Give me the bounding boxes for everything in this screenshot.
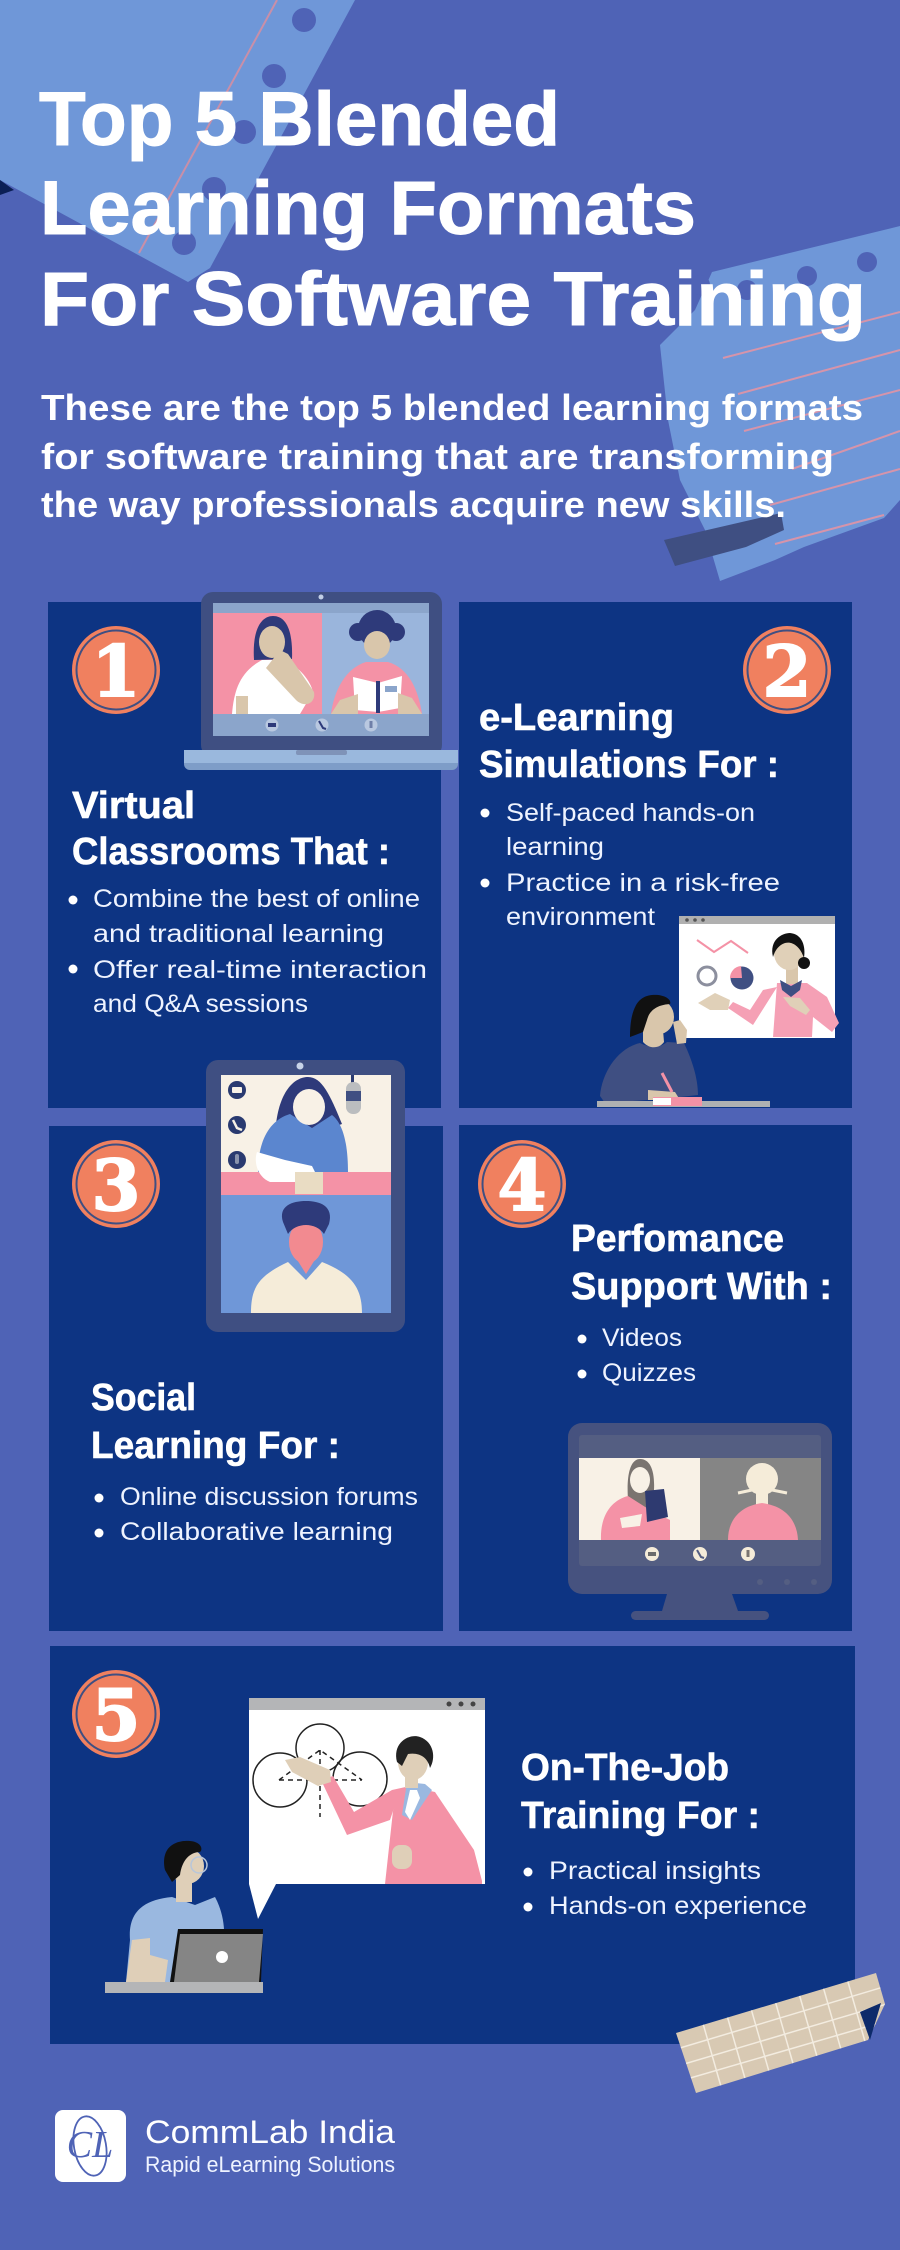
bullet list: Practice in a risk-free [506,869,780,897]
bullet list [578,1324,696,1387]
intro text [41,387,863,525]
number badge 2: 2 [763,630,811,713]
logo mark: CL [67,2124,113,2166]
logo: CommLab India [55,2110,395,2182]
number badge 5 [72,1670,160,1758]
logo mark [55,2110,126,2182]
heading: Perfomance [571,1218,784,1260]
heading: Virtual [72,785,195,827]
number badge 5: 5 [92,1674,140,1757]
heading [72,785,390,873]
bullet list: Hands-on experience [549,1892,807,1920]
panel 1: virtual classrooms [48,592,458,1108]
heading [521,1747,760,1837]
title: Top 5 Blended [39,77,560,162]
bullet list: Self-paced hands-on [506,799,755,827]
number badge 1: 1 [92,630,140,713]
speech bubble whiteboard with presenter [249,1698,485,1919]
heading: Learning For : [91,1425,340,1467]
bullet list: Videos [602,1324,682,1352]
company tagline: Rapid eLearning Solutions [145,2152,395,2177]
number badge 3 [72,1140,160,1228]
heading: On-The-Job [521,1747,729,1789]
bullet list: Collaborative learning [120,1518,393,1546]
title: Learning Formats [40,166,696,251]
bullet list: Combine the best of online [93,885,420,913]
bullet list [94,1483,418,1546]
panel 5: on-the-job training [50,1646,855,2044]
bullet list: Quizzes [602,1359,696,1387]
decorative paper: top right [660,226,900,581]
intro text: for software training that are transforming [41,436,834,477]
number badge 3: 3 [92,1144,140,1227]
bullet list [68,885,427,1018]
panel 4: performance support [459,1125,852,1631]
student with laptop illustration [105,1841,263,1993]
panel 3: social learning [49,1060,443,1631]
laptop illustration [184,592,458,770]
number badge 4 [478,1140,566,1228]
heading: Classrooms That : [72,831,390,873]
washi tape decoration [670,1973,890,2093]
intro text: These are the top 5 blended learning formats [41,387,863,428]
decorative paper: top left [0,0,355,282]
heading [91,1377,340,1467]
monitor illustration [568,1423,832,1620]
heading: Simulations For : [479,744,779,786]
bullet list: Offer real-time interaction [93,956,427,984]
bullet list [480,799,780,931]
heading: Training For : [521,1795,760,1837]
tablet illustration [206,1060,405,1332]
bullet list: Practical insights [549,1857,761,1885]
intro text: the way professionals acquire new skills. [41,484,786,525]
bullet list: Online discussion forums [120,1483,418,1511]
company name: CommLab India [145,2114,395,2150]
title [39,77,866,342]
bullet list: and Q&A sessions [93,990,308,1018]
heading [479,697,779,786]
heading: Support With : [571,1266,832,1308]
title: For Software Training [40,257,866,342]
bullet list: and traditional learning [93,920,384,948]
bullet list [524,1857,807,1920]
heading: Social [91,1377,196,1419]
whiteboard presenter illustration [597,916,839,1107]
bullet list: learning [506,833,604,861]
heading: e-Learning [479,697,674,739]
number badge 4: 4 [498,1144,546,1227]
bullet list: environment [506,903,655,931]
heading [571,1218,832,1308]
dark tape strip [664,513,784,566]
number badge 1 [72,626,160,714]
panel 2: e-learning simulations [459,602,852,1108]
number badge 2 [743,626,831,714]
